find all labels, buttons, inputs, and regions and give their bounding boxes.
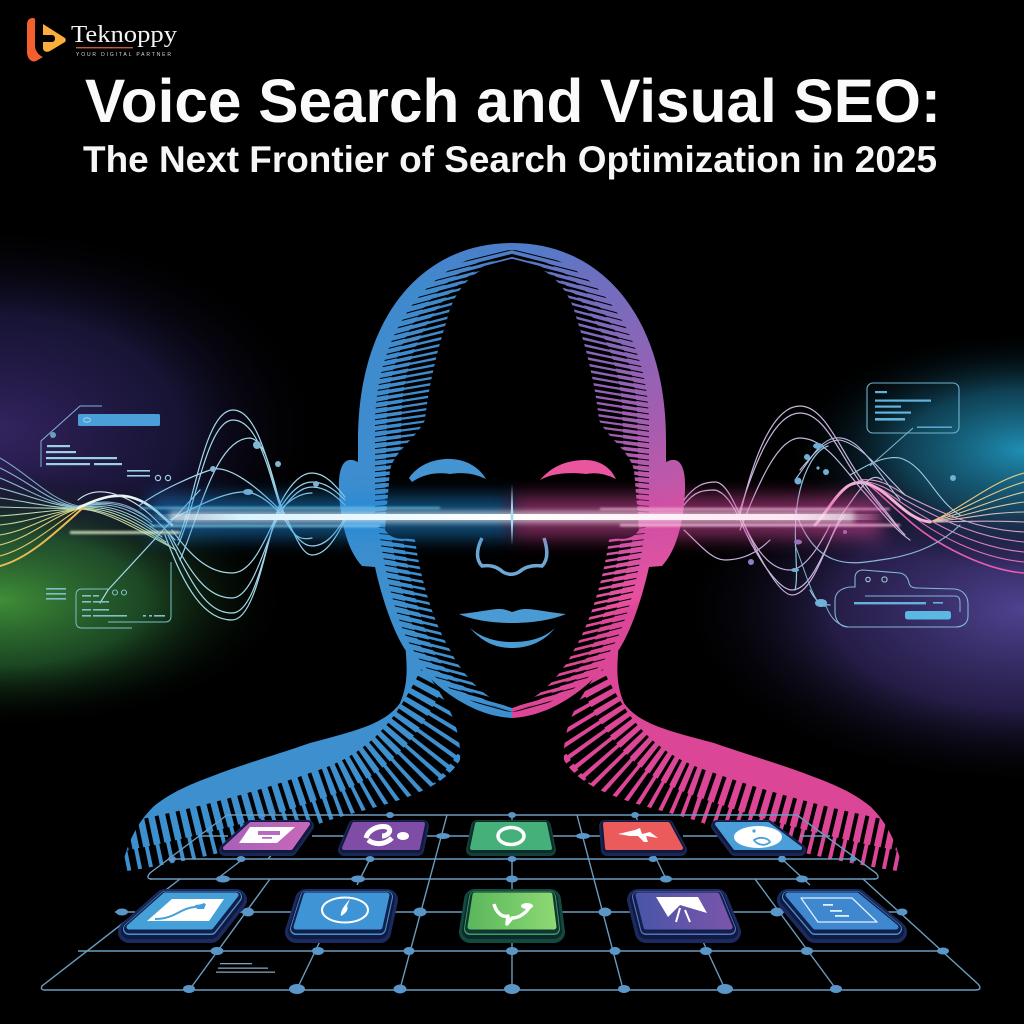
vertical light glint [511,484,513,545]
search bar icon [84,418,90,422]
grid horizontal lines [45,815,975,990]
grid outer edges [41,815,980,990]
left bottom panel [46,562,171,628]
panel text lines [854,602,943,604]
search bar [78,414,160,426]
tile: green ring [472,824,550,850]
beam outer glow left [150,496,512,538]
nose [478,538,547,574]
tile: purple pointer [638,895,730,932]
grid nodes [116,812,949,994]
icon: leaf shapes [494,904,530,924]
grid caption lines [216,963,275,973]
panel outline [867,383,959,433]
right fan lines [795,438,1024,573]
right large waves [684,406,960,605]
title [83,67,941,180]
icon: pointer [656,897,707,917]
icon: curve card [147,899,224,921]
beam core right [512,514,884,520]
beam core left [150,514,512,520]
icon: cloud face [734,826,782,848]
tile: red figure [605,824,681,850]
beam outer glow right [512,496,882,538]
left data wave lines [0,410,345,620]
panel connector [870,428,913,466]
logo icon [27,18,66,61]
panel inner frame [865,596,960,612]
lips [459,609,566,623]
perspective grid [41,815,980,990]
small circles [112,590,126,595]
tile: blue face [717,824,800,850]
title line 2: The Next Frontier of Search Optimization in 2025 [83,139,937,180]
tile: blue curve [129,895,236,932]
logo underline [76,47,133,48]
panel connector [795,545,848,627]
left eyebrow [409,459,486,482]
left wave nodes [210,441,319,495]
icon: gauge [322,898,368,922]
light beam [70,484,900,545]
panel connector [41,406,102,467]
facial features [409,459,616,648]
icon: swirl [366,827,392,844]
background glow: right teal [784,330,1024,570]
logo [27,18,178,61]
tile: purple speech [344,824,423,850]
background glow: left purple [0,220,330,640]
right eyebrow [540,460,616,480]
logo wordmark: Teknoppy [71,21,178,48]
panel node [50,432,56,438]
grid receding lines [190,815,836,989]
icon: ring [498,828,524,844]
background glow: left green [0,470,290,730]
list lines [46,588,165,617]
right top panel [867,383,959,466]
head silhouette [339,235,685,730]
tile: blue gauge [296,895,387,932]
right data wave lines [684,406,1024,607]
title line 1: Voice Search and Visual SEO: [85,67,941,135]
beam streaks left [70,507,440,534]
icon: document [239,827,295,843]
icon: list card [801,898,877,922]
shoulders and neck [112,640,912,877]
left large waves [100,410,345,620]
beam core glow [170,511,854,523]
text lines [46,445,150,477]
icon: running figure [618,828,658,842]
tile: green leaf [470,895,554,932]
tile: pink document [225,824,308,850]
left top panel [41,406,171,481]
background glow: right purple [674,430,1024,790]
logo tagline: YOUR DIGITAL PARTNER [76,52,171,58]
panel outline [835,570,968,627]
left fan lines [0,458,176,566]
tile: blue list [788,895,896,932]
small circles [155,475,171,481]
smile [470,628,555,648]
right bottom panel [795,545,968,627]
beam streaks right [600,508,900,526]
panel text lines [875,391,952,428]
right wave nodes [748,443,956,607]
panel circles [866,577,887,582]
panel button [905,611,951,620]
panel outline [76,562,171,628]
